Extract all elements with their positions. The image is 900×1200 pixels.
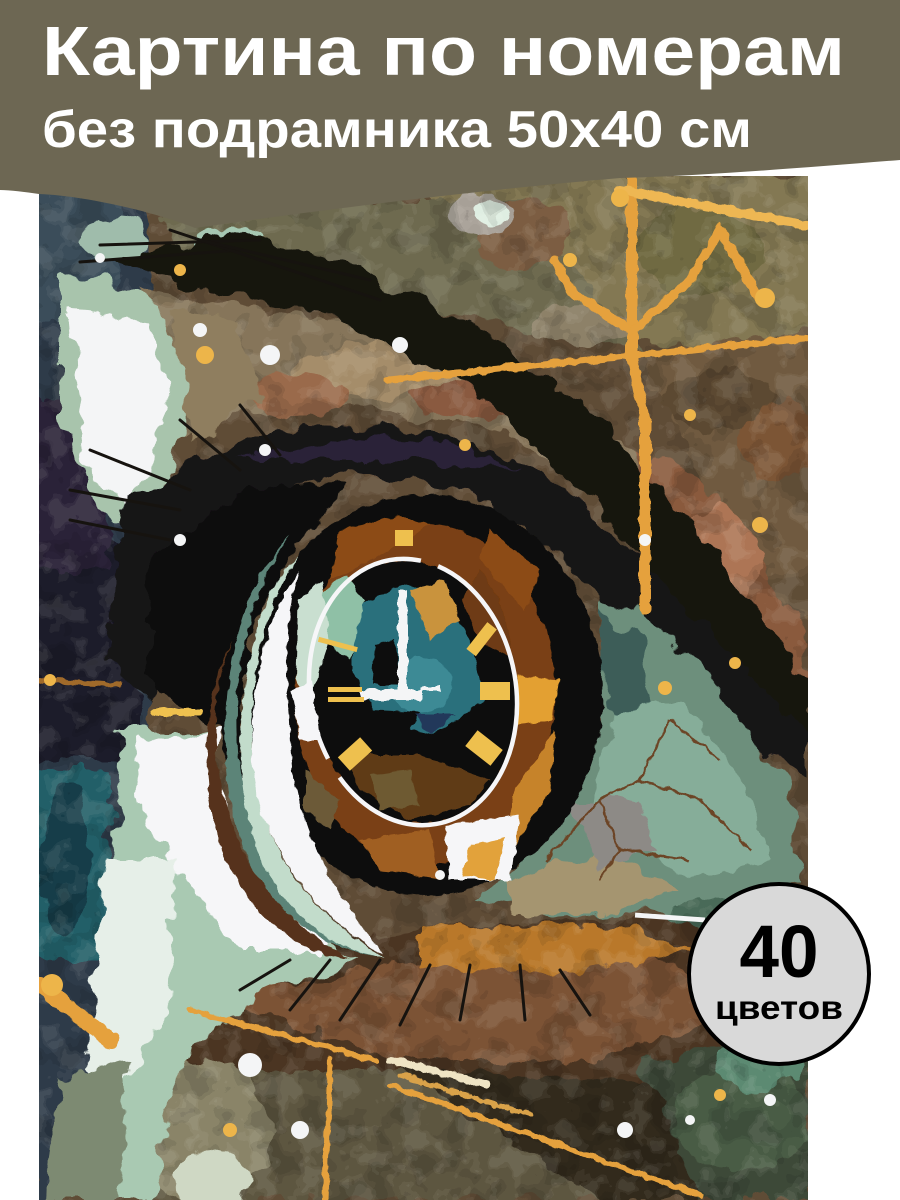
sclera with cracks bbox=[480, 600, 800, 920]
badge: 40 colours bbox=[689, 884, 869, 1064]
badge: 40 colours: цветов bbox=[715, 989, 843, 1026]
eye white crescent bbox=[207, 535, 385, 960]
subtitle: без подрамника 50х40 см bbox=[42, 101, 752, 159]
lower lid and cheek bbox=[186, 912, 722, 1084]
roman numerals bbox=[318, 530, 510, 771]
painting: eye with clock bbox=[30, 176, 820, 1200]
paint specks bbox=[95, 253, 776, 1139]
painted skin and brow areas bbox=[30, 176, 820, 1200]
paint-by-number mottling bbox=[39, 176, 808, 1200]
clock hands bbox=[360, 590, 442, 700]
black surround of the iris bbox=[247, 495, 603, 895]
gold lines bbox=[40, 176, 808, 1200]
face highlight bbox=[40, 218, 360, 1200]
iris bbox=[288, 515, 558, 880]
title: Картина по номерам bbox=[42, 12, 845, 90]
dark crease and eyelid bbox=[110, 232, 810, 810]
header banner bbox=[0, 0, 900, 228]
badge: 40 colours: 40 bbox=[740, 910, 818, 993]
clock ring bbox=[306, 556, 520, 828]
lashes bbox=[70, 230, 590, 1025]
